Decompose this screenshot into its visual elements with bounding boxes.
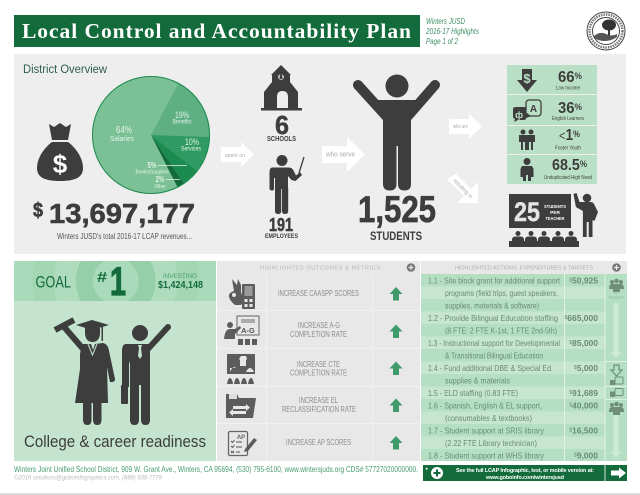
stat: english learners xyxy=(552,100,584,122)
student group: all students lower xyxy=(609,402,624,458)
icon: teacher xyxy=(270,155,304,214)
footer copyright: ©2016 solutions@goboinfographics.com, (888) 938-7779 xyxy=(14,474,162,482)
title banner: Local Control and Accountability Plan xyxy=(22,19,411,43)
icon: district seal xyxy=(587,12,625,50)
student group: all students xyxy=(608,279,624,358)
student group: all students: All xyxy=(614,291,618,295)
icon: AP checklist xyxy=(228,432,257,456)
stat: foster youth: <1 xyxy=(559,127,574,144)
action descriptions: 1.8 - Student support at WHS library xyxy=(428,450,545,460)
arrow: resulting in: resulting in xyxy=(452,178,474,200)
icon: white arrow xyxy=(611,468,626,478)
outcome: A-G completion rate: INCREASE A-G xyxy=(298,321,340,330)
action amounts: 5,000 xyxy=(577,363,598,373)
action descriptions: 1.2 - Provide Bilingual Education staffing xyxy=(428,313,558,323)
stat: unduplicated high need: Unduplicated High Need xyxy=(544,175,592,181)
icon: language speech bubbles xyxy=(513,100,541,122)
pie chart: revenue spending: Books/Supplies xyxy=(136,170,169,176)
footer address: Winters Joint Unified School District, 909 W. Grant Ave., Winters, CA 95694, (530) 795-6100, www.wintersjuds.org CDS# 57727020000000. xyxy=(14,465,418,474)
outcome: A-G completion rate: COMPLETION RATE xyxy=(290,330,347,339)
stat: low income: % xyxy=(575,71,582,81)
outcome: AP scores xyxy=(228,432,402,456)
goal header strip: # xyxy=(97,269,108,286)
icon: foster family xyxy=(519,130,535,150)
action amounts: $ xyxy=(569,340,572,346)
goal name: College & career readiness xyxy=(24,433,206,451)
action descriptions: supplies, materials & software) xyxy=(445,300,539,310)
action amounts xyxy=(564,276,598,460)
action descriptions: 1.5 - ELD staffing (0.83 FTE) xyxy=(428,388,518,398)
action descriptions: 1.1 - Site block grant for additional support xyxy=(428,276,561,286)
icon: classroom students per teacher: 25 xyxy=(514,197,540,227)
students count: STUDENTS xyxy=(370,229,422,243)
table row stripes xyxy=(421,274,627,461)
heading: district overview: District Overview xyxy=(23,64,108,76)
district subtitle: Winters JUSD xyxy=(426,16,465,26)
action descriptions: & Transitional Bilingual Education xyxy=(445,350,543,360)
stat: unduplicated high need: % xyxy=(580,159,587,169)
outcome: CTE completion rate xyxy=(227,354,402,384)
icon: classroom students per teacher: STUDENTS xyxy=(544,204,567,210)
stat: foster youth: % xyxy=(573,129,580,139)
employees count: EMPLOYEES xyxy=(265,233,298,240)
action descriptions: supplies & materials xyxy=(445,376,510,386)
student group: all students: Students xyxy=(608,296,624,300)
district subtitle: Page 1 of 2 xyxy=(426,36,458,46)
action descriptions: 1.7 - Student support at SRIS library xyxy=(428,426,545,436)
icon: language speech bubbles: ф xyxy=(515,110,523,120)
panel: goal 1 xyxy=(14,261,216,461)
action amounts: 85,000 xyxy=(572,338,598,348)
district subtitle: 2016-17 Highlights xyxy=(425,26,480,36)
stat: unduplicated high need xyxy=(544,157,592,181)
icon: language speech bubbles: A xyxy=(530,104,537,115)
icon: student with raised arms xyxy=(358,74,435,190)
icon: classroom students per teacher xyxy=(509,193,598,247)
schools count xyxy=(267,110,296,143)
action amounts: 91,689 xyxy=(572,388,598,398)
employees count xyxy=(265,215,298,240)
goal header strip: INVESTING xyxy=(163,273,197,280)
panel: student demographics xyxy=(507,65,597,184)
outcome: EL reclassification rate xyxy=(226,394,402,418)
outcome: AP scores: INCREASE AP SCORES xyxy=(286,438,351,447)
action amounts: 50,925 xyxy=(572,276,598,286)
outcome: CTE completion rate: COMPLETION RATE xyxy=(290,368,347,378)
stat: low income xyxy=(556,69,582,92)
icon: money bag: $ xyxy=(53,149,68,179)
action amounts: 16,500 xyxy=(572,426,598,436)
actions heading xyxy=(455,263,621,272)
action amounts: 665,000 xyxy=(567,313,598,323)
stat: english learners: % xyxy=(575,102,582,112)
outcomes heading xyxy=(260,263,415,272)
district subtitle xyxy=(425,16,480,46)
action amounts: $ xyxy=(574,365,577,371)
callout: full infographic link: See the full LCAP Infographic, text, or mobile version at: xyxy=(456,468,594,474)
stat: low income: Low Income xyxy=(556,86,580,92)
icon: classroom students per teacher: TEACHER xyxy=(546,216,565,222)
stat: foster youth: Foster Youth xyxy=(555,146,581,152)
icon: dollar down arrow: $ xyxy=(523,71,531,86)
schools count: 6 xyxy=(275,110,289,140)
stat: english learners: English Learners xyxy=(552,116,584,122)
goal header strip xyxy=(14,261,216,301)
icon: graduate xyxy=(55,320,115,425)
action amounts: $ xyxy=(569,390,572,396)
icon: presenter with A-G board: A-G xyxy=(241,326,255,335)
goal header strip: 1 xyxy=(110,260,126,304)
stat: unduplicated high need: 68.5 xyxy=(552,157,580,174)
action amounts: $ xyxy=(569,428,572,434)
arrow: who are xyxy=(449,114,482,139)
pie chart: revenue spending: Services xyxy=(181,146,202,152)
arrow: who serve xyxy=(322,137,365,172)
action descriptions: (consumables & textbooks) xyxy=(445,413,532,423)
student group: low income and english learners xyxy=(610,365,623,385)
icon: folder with arrows xyxy=(226,394,256,418)
students count xyxy=(358,189,436,243)
action descriptions: 1.3 - Instructional support for Developmental xyxy=(428,338,560,348)
action descriptions: (2.22 FTE Library technician) xyxy=(445,438,537,448)
stat: foster youth xyxy=(555,127,581,152)
arrow: who are: who are xyxy=(452,124,468,130)
callout: full infographic link xyxy=(423,465,627,481)
pie chart: revenue spending: 64% xyxy=(116,125,132,136)
arrow: spent on xyxy=(221,142,254,167)
icon: group of students xyxy=(609,279,624,292)
action descriptions: programs (field trips, guest speakers, xyxy=(445,288,558,298)
icon: hand and calculator xyxy=(229,279,255,309)
panel: highlighted actions and expenditures xyxy=(421,261,627,461)
action descriptions: 1.4 - Fund additional DBE & Special Ed. xyxy=(428,363,553,373)
schools count: SCHOOLS xyxy=(267,134,296,143)
icon: person in suit xyxy=(520,158,534,181)
students count: 1,525 xyxy=(358,189,436,230)
action amounts: 40,000 xyxy=(572,400,598,410)
arrow: resulting in xyxy=(447,174,478,203)
pie chart: revenue spending: 10% xyxy=(185,137,199,147)
outcome: CTE completion rate: INCREASE CTE xyxy=(297,360,340,369)
pie chart: revenue spending: Benefits xyxy=(172,118,192,126)
outcome: EL reclassification rate: RECLASSIFICATION RATE xyxy=(282,405,356,414)
callout: full infographic link: * xyxy=(426,468,428,474)
outcome: CAASPP scores: INCREASE CAASPP SCORES xyxy=(278,289,359,298)
pie chart: revenue spending: 5% xyxy=(148,161,156,170)
outcome: CAASPP scores xyxy=(229,279,402,309)
action descriptions: 1.6 - Spanish, English & EL support, xyxy=(428,400,542,410)
pie chart: revenue spending: Salaries xyxy=(110,134,134,143)
pie chart: revenue spending: 19% xyxy=(175,110,189,120)
icon: money bag xyxy=(37,123,83,181)
icon: schoolhouse xyxy=(261,65,302,110)
goal header strip: $1,424,148 xyxy=(158,280,203,291)
panel: highlighted outcomes and metrics xyxy=(217,261,420,461)
callout: full infographic link: www.goboinfo.com/wintersjusd xyxy=(485,475,564,481)
actions heading: HIGHLIGHTED ACTIONS, EXPENDITURES & TARGETS xyxy=(455,266,593,272)
pie chart: revenue spending: 2% xyxy=(156,175,164,184)
total revenue figure: 13,697,177 xyxy=(49,198,195,229)
goal header strip: GOAL xyxy=(36,272,71,292)
icon: presenter with A-G board xyxy=(224,316,259,345)
arrow: spent on: spent on xyxy=(225,153,245,159)
action amounts: $ xyxy=(569,402,572,408)
employees count: 191 xyxy=(269,215,293,235)
action amounts: 9,000 xyxy=(577,450,598,460)
action amounts: $ xyxy=(564,315,567,321)
icon: culinary class xyxy=(227,354,255,384)
pie chart: revenue spending xyxy=(92,76,210,194)
action descriptions: (8 FTE: 2 FTE K-1st, 1 FTE 2nd-5th) xyxy=(445,326,557,336)
action descriptions xyxy=(428,276,561,460)
stat: low income: 66 xyxy=(558,69,575,86)
action amounts: $ xyxy=(569,278,572,284)
student group: english learners xyxy=(610,388,623,397)
outcome: A-G completion rate xyxy=(224,316,402,345)
total revenue figure: $ xyxy=(33,200,43,222)
revenue caption: Winters JUSD's total 2016-17 LCAP revenues... xyxy=(57,232,192,241)
pie chart: revenue spending: Other xyxy=(154,184,166,190)
arrow: who serve: who serve xyxy=(325,150,355,158)
outcome: EL reclassification rate: INCREASE EL xyxy=(299,396,338,405)
icon: AP checklist: AP xyxy=(237,435,245,441)
stat: english learners: 36 xyxy=(558,100,575,117)
outcomes heading: HIGHLIGHTED OUTCOMES & METRICS xyxy=(260,266,380,272)
icon: businessman xyxy=(121,325,168,425)
icon: classroom students per teacher: PER xyxy=(550,210,560,216)
action amounts: $ xyxy=(574,452,577,458)
